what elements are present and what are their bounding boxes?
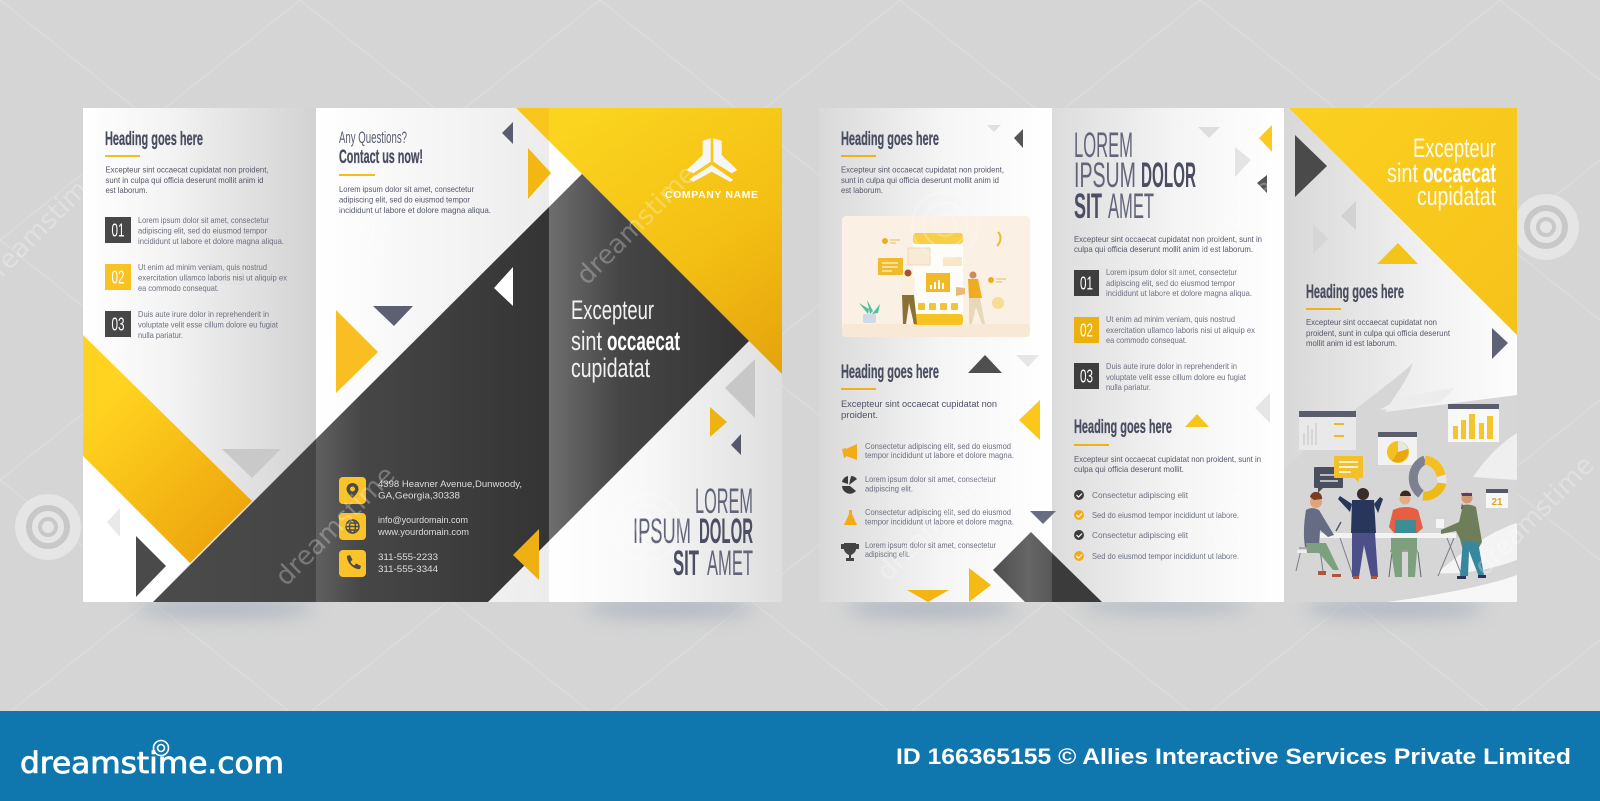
numbered item 03: Duis aute irure dolor in reprehenderit in bbox=[1106, 362, 1237, 371]
yellow diagonal band bbox=[83, 335, 252, 563]
icon: phone bbox=[347, 555, 361, 569]
figure: standing back bbox=[1338, 488, 1383, 579]
intro text: inside left: Excepteur sint occaecat cupidatat non proident, bbox=[841, 164, 1004, 174]
figure: man left bbox=[901, 270, 917, 324]
cover title: white: cupidatat bbox=[571, 353, 650, 383]
brochure: outside spread: AMET bbox=[707, 544, 753, 583]
triangle accents: left flap bbox=[107, 449, 281, 597]
watermark text: dreamstime bbox=[1149, 173, 1280, 305]
title: cover excepteur inside right: Excepteur bbox=[1413, 133, 1496, 163]
heading: inside left top: Heading goes here bbox=[841, 129, 939, 150]
screen: list chart bbox=[1299, 411, 1356, 450]
heading: inside right: Heading goes here bbox=[1306, 282, 1404, 303]
feature: flask: Consectetur adipiscing elit, sed do eiusmod bbox=[865, 508, 1011, 517]
speech bubble yellow bbox=[1334, 456, 1363, 482]
brochure: outside spread: DOLOR bbox=[699, 512, 753, 551]
lead text: inside left lower: proident. bbox=[841, 410, 878, 420]
check item 3: Consectetur adipiscing elit bbox=[1092, 531, 1189, 540]
numbered item 03 bbox=[1074, 362, 1247, 392]
watermark text bbox=[0, 159, 1600, 592]
lead text: inside middle: culpa qui officia deserunt mollit anim id est laborum. bbox=[1074, 244, 1253, 254]
numbered item 01: incididunt ut labore et dolore magna aliqua. bbox=[138, 237, 284, 246]
plant bbox=[859, 300, 880, 323]
brochure: inside spread bbox=[819, 108, 1517, 602]
feature: trophy: Lorem ipsum dolor sit amet, consectetur bbox=[865, 541, 996, 550]
triangle accents: inside left bbox=[907, 125, 1056, 602]
title: lorem ipsum inside: IPSUM bbox=[1074, 156, 1136, 195]
intro text: inside left: est laborum. bbox=[841, 185, 883, 195]
numbered item 03 bbox=[105, 310, 279, 340]
intro text: inside right bbox=[1306, 317, 1451, 348]
title: lorem ipsum inside: AMET bbox=[1108, 187, 1154, 226]
speech bubble dark bbox=[1314, 467, 1343, 493]
feature: pie chart: Lorem ipsum dolor sit amet, consectetur bbox=[865, 475, 996, 484]
check item 1: Consectetur adipiscing elit bbox=[1092, 491, 1189, 500]
figure: seated left bbox=[1296, 492, 1341, 577]
numbered item 02 bbox=[105, 263, 287, 293]
numbered item 03: 03 bbox=[1080, 366, 1093, 386]
title: cover excepteur inside right: cupidatat bbox=[1417, 181, 1496, 211]
lead text: checklist: Excepteur sint occaecat cupidatat non proident, sunt in bbox=[1074, 454, 1261, 464]
lead text: inside left lower bbox=[841, 399, 997, 420]
cover title: lorem bbox=[633, 482, 753, 583]
numbered item 03: voluptate velit esse cillum dolore eu fugiat bbox=[1106, 373, 1247, 382]
heading: left flap: Heading goes here bbox=[105, 129, 203, 150]
numbered item 02: 02 bbox=[1080, 320, 1093, 340]
cover title: lorem: SIT bbox=[673, 544, 699, 583]
contact: address: GA,Georgia,30338 bbox=[378, 490, 460, 500]
heading: inside left lower: Heading goes here bbox=[841, 362, 939, 383]
numbered item 03: nulla pariatur. bbox=[1106, 383, 1151, 392]
feature: trophy: adipiscing elit. bbox=[865, 550, 910, 559]
numbered item 03: 03 bbox=[112, 314, 124, 334]
numbered item 01: adipiscing elit, sed do eiusmod tempor bbox=[1106, 279, 1235, 288]
numbered item 02: exercitation ullamco laboris nisi ut aliquip ex bbox=[138, 274, 287, 282]
numbered item 01: incididunt ut labore et dolore magna aliqua. bbox=[1106, 289, 1252, 298]
illustration: app planning bbox=[842, 216, 1030, 337]
feature: pie chart bbox=[842, 475, 996, 494]
title: cover excepteur inside right bbox=[1387, 133, 1496, 211]
grey swooshes behind team bbox=[1284, 363, 1517, 602]
panel: inside middle bbox=[1052, 108, 1284, 602]
title: lorem ipsum inside: LOREM bbox=[1074, 126, 1133, 165]
panel: inside left bbox=[819, 108, 1052, 602]
feature: megaphone: tempor incididunt ut labore et dolore magna. bbox=[865, 451, 1014, 460]
figure: standing right bbox=[1436, 492, 1486, 579]
icon: globe bbox=[346, 520, 359, 533]
intro text: inside right: proident, sunt in culpa qui officia deserunt bbox=[1306, 328, 1451, 338]
lead text: inside middle: Excepteur sint occaecat cupidatat non proident, sunt in bbox=[1074, 234, 1262, 244]
numbered item 02: exercitation ullamco laboris nisi ut aliquip ex bbox=[1106, 326, 1255, 335]
screen: pie bbox=[1378, 432, 1417, 465]
title: lorem ipsum inside: SIT bbox=[1074, 187, 1102, 226]
logo: company: COMPANY NAME bbox=[665, 189, 758, 201]
contact: phone: 311-555-3344 bbox=[378, 564, 438, 574]
logo: company bbox=[665, 138, 758, 201]
cover title: lorem: IPSUM bbox=[633, 512, 691, 551]
heading: contact: Contact us now! bbox=[339, 147, 423, 168]
intro text: inside left: sunt in culpa qui officia deserunt mollit anim id bbox=[841, 175, 999, 185]
watermark text: dreamstime bbox=[1469, 450, 1600, 582]
lead text: checklist bbox=[1074, 454, 1261, 474]
lead text: checklist: culpa qui officia deserunt mollit. bbox=[1074, 464, 1184, 474]
feature: trophy bbox=[841, 541, 996, 561]
watermark spirals over panels bbox=[319, 192, 1279, 560]
panel: left back flap bbox=[83, 108, 316, 602]
brochure drop shadows bbox=[135, 597, 1485, 619]
numbered item 01: Lorem ipsum dolor sit amet, consectetur bbox=[138, 216, 269, 225]
heading: contact bbox=[339, 128, 423, 176]
contact intro text: adipiscing elit, sed do eiusmod tempor bbox=[339, 194, 470, 204]
illustration: team meeting bbox=[1296, 404, 1508, 579]
contact: phone bbox=[339, 550, 438, 577]
numbered item 01 bbox=[105, 216, 284, 246]
check item 4: Sed do eiusmod tempor incididunt ut labore. bbox=[1092, 552, 1239, 561]
panel: cover bbox=[549, 108, 782, 602]
heading: inside middle: Heading goes here bbox=[1074, 417, 1172, 438]
contact: web: www.yourdomain.com bbox=[377, 527, 469, 537]
lower white corner of left flap bbox=[83, 456, 190, 602]
contact: web bbox=[339, 513, 469, 540]
numbered item 01: adipiscing elit, sed do eiusmod tempor bbox=[138, 226, 267, 236]
icon: tri-arrow logo bbox=[687, 138, 737, 182]
dark diamond at fold bbox=[993, 532, 1102, 602]
title: cover excepteur inside right: occaecat bbox=[1423, 158, 1496, 188]
figure: seated centre bbox=[1389, 491, 1423, 577]
cover title: white: Excepteur bbox=[571, 295, 654, 325]
numbered item 02: 02 bbox=[112, 268, 124, 288]
title: lorem ipsum inside bbox=[1074, 126, 1196, 226]
lead text: inside left lower: Excepteur sint occaecat cupidatat non bbox=[841, 399, 997, 409]
check item 2: Sed do eiusmod tempor incididunt ut labore. bbox=[1092, 511, 1239, 520]
panel: inside right bbox=[1284, 108, 1517, 602]
numbered item 03: voluptate velit esse cillum dolore eu fugiat bbox=[138, 320, 279, 330]
intro text: left flap: est laborum. bbox=[106, 185, 148, 195]
icon: map pin bbox=[346, 483, 358, 498]
numbered item 01: 01 bbox=[1080, 274, 1093, 294]
numbered item 03: Duis aute irure dolor in reprehenderit in bbox=[138, 310, 269, 319]
contact: address bbox=[339, 477, 522, 504]
cover title: white: occaecat bbox=[607, 326, 680, 356]
lead text: inside middle bbox=[1074, 234, 1262, 254]
numbered item 02: ea commodo consequat. bbox=[138, 284, 219, 293]
feature: flask: tempor incididunt ut labore et dolore magna. bbox=[865, 518, 1014, 526]
credit line: ID 166365155 © Allies Interactive Services Private Limited bbox=[896, 744, 1571, 769]
footer banner bbox=[0, 711, 1600, 801]
intro text: left flap bbox=[106, 164, 268, 195]
brochure: outside spread: LOREM bbox=[695, 482, 753, 521]
triangle accents: inside right bbox=[1295, 135, 1508, 359]
dark diagonal shape bbox=[153, 174, 749, 602]
watermark text: dreamstime bbox=[270, 460, 401, 592]
watermark text: dreamstime bbox=[872, 455, 1003, 587]
contact intro text bbox=[339, 184, 491, 215]
cover title: white: sint bbox=[571, 326, 602, 356]
cover title: white bbox=[571, 295, 680, 383]
yellow cover triangle bbox=[516, 108, 782, 374]
calendar bbox=[1486, 489, 1508, 508]
calendar: 21 bbox=[1491, 497, 1503, 508]
watermark spirals bbox=[15, 194, 1579, 560]
numbered item 02: ea commodo consequat. bbox=[1106, 336, 1187, 345]
intro text: inside left bbox=[841, 164, 1004, 195]
feature: megaphone bbox=[842, 442, 1014, 460]
figure: man right bbox=[956, 272, 985, 324]
donut chart bbox=[1413, 460, 1442, 496]
triangle accents: contact panel bbox=[336, 108, 551, 393]
feature: flask bbox=[844, 508, 1014, 526]
intro text: left flap: Excepteur sint occaecat cupidatat non proident, bbox=[106, 164, 268, 174]
contact intro text: incididunt ut labore et dolore magna aliqua. bbox=[339, 205, 491, 215]
logo: dreamstime: dreamstime.com bbox=[20, 746, 284, 780]
panel: contact middle bbox=[316, 108, 549, 602]
numbered item 01: Lorem ipsum dolor sit amet, consectetur bbox=[1106, 268, 1237, 277]
title: cover excepteur inside right: sint bbox=[1387, 158, 1418, 188]
screen: bars bbox=[1448, 404, 1499, 442]
numbered item 02: Ut enim ad minim veniam, quis nostrud bbox=[1106, 315, 1235, 324]
brochure: outside spread bbox=[83, 108, 782, 602]
numbered item 01 bbox=[1074, 268, 1252, 298]
heading: contact: Any Questions? bbox=[339, 128, 407, 147]
intro text: inside right: Excepteur sint occaecat cupidatat non bbox=[1306, 317, 1437, 327]
triangle accents: cover bbox=[513, 359, 755, 580]
watermark text: dreamstime bbox=[571, 159, 702, 291]
numbered item 02: Ut enim ad minim veniam, quis nostrud bbox=[138, 263, 267, 272]
table bbox=[1320, 533, 1462, 576]
numbered item 03: nulla pariatur. bbox=[138, 331, 183, 340]
intro text: inside right: mollit anim id est laborum. bbox=[1306, 338, 1397, 348]
checklist bbox=[1074, 490, 1239, 561]
numbered item 02 bbox=[1074, 315, 1255, 345]
contact: phone: 311-555-2233 bbox=[378, 552, 438, 562]
brochure: inside spread: DOLOR bbox=[1141, 156, 1196, 195]
numbered item 01: 01 bbox=[112, 220, 124, 240]
contact: web: info@yourdomain.com bbox=[378, 515, 468, 525]
triangle accents: inside middle bbox=[1185, 125, 1272, 427]
contact intro text: Lorem ipsum dolor sit amet, consectetur bbox=[339, 184, 474, 194]
contact: address: 4398 Heavner Avenue,Dunwoody, bbox=[378, 479, 522, 489]
intro text: left flap: sunt in culpa qui officia deserunt mollit anim id bbox=[106, 175, 264, 185]
feature: pie chart: adipiscing elit. bbox=[865, 484, 913, 494]
feature: megaphone: Consectetur adipiscing elit, sed do eiusmod bbox=[865, 442, 1011, 451]
yellow cover triangle bbox=[1289, 108, 1517, 335]
